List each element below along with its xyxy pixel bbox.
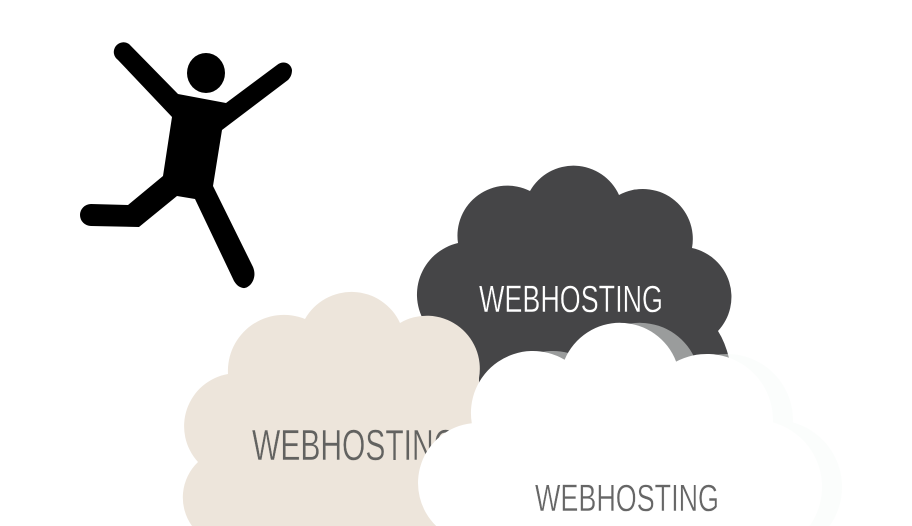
cloud: dark	[417, 166, 731, 400]
dark cloud shape	[417, 166, 731, 400]
cloud: translucent shadow	[438, 323, 842, 526]
person head	[187, 53, 225, 93]
white cloud shape	[418, 323, 822, 526]
dark cloud label: WEBHOSTING	[479, 279, 663, 321]
cloud: white	[418, 323, 822, 526]
white cloud label: WEBHOSTING	[535, 478, 719, 520]
beige cloud shape	[183, 292, 480, 526]
icon: jumping person	[80, 42, 292, 288]
person body and limbs	[80, 42, 292, 288]
beige cloud label: WEBHOSTING	[252, 422, 457, 470]
cloud: beige	[183, 292, 480, 526]
